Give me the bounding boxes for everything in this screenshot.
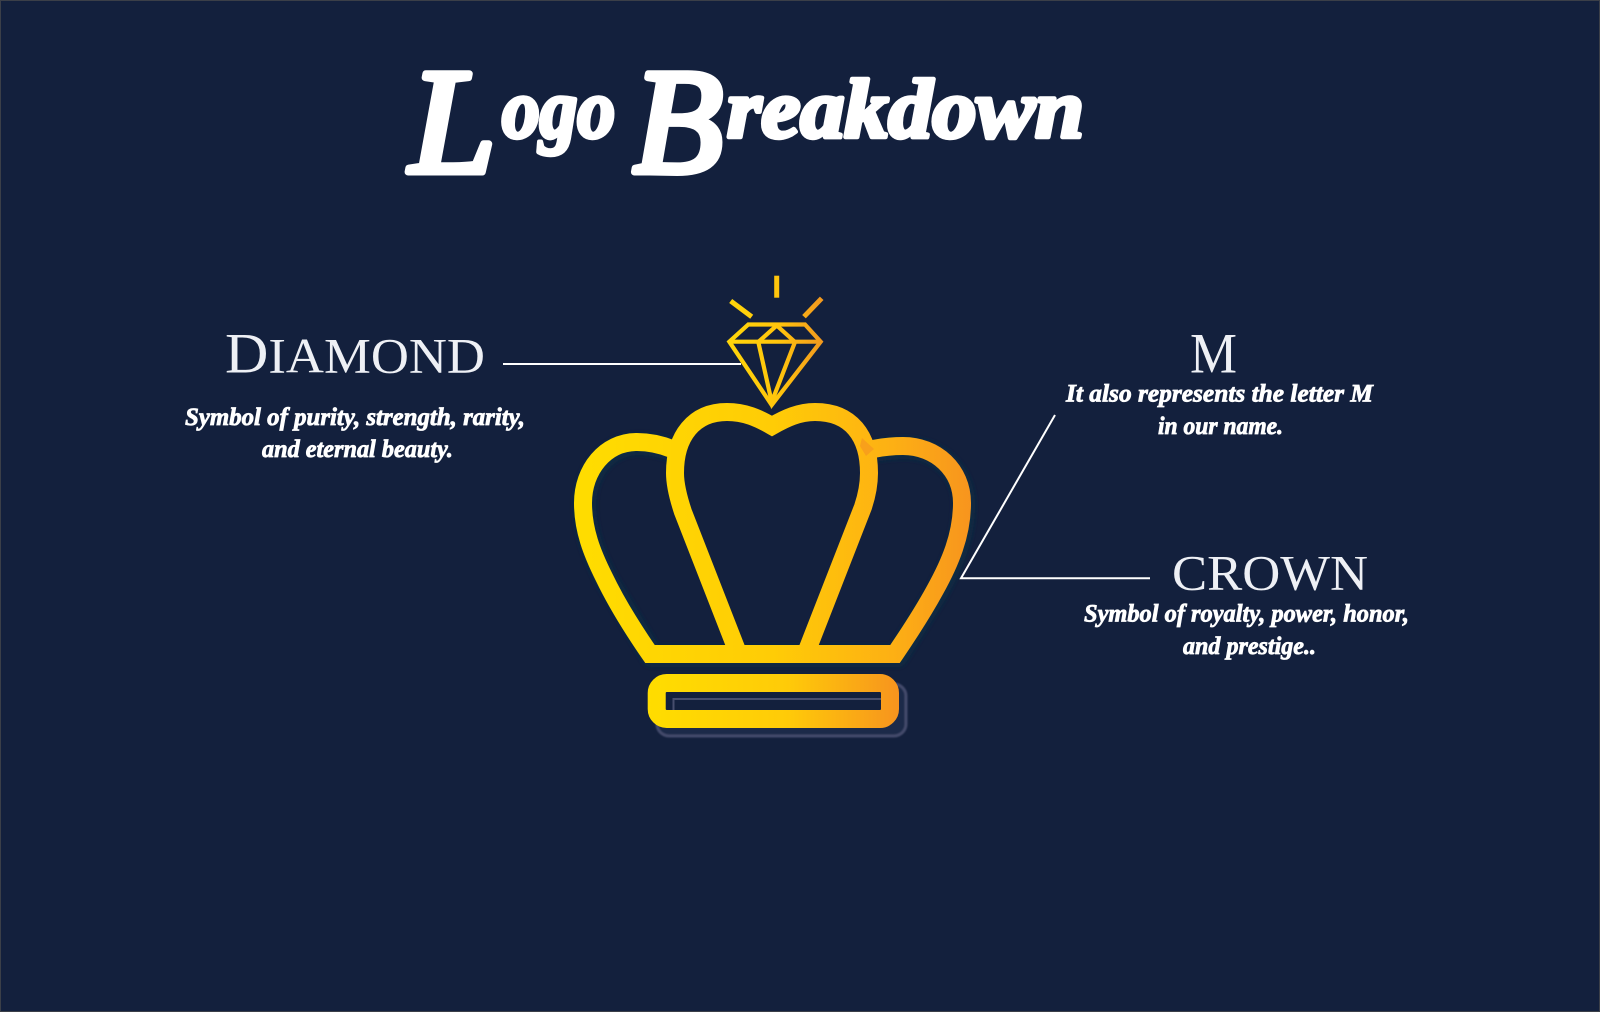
label: crown heading: CROWN — [1172, 544, 1368, 600]
text: diamond description — [185, 404, 525, 463]
title: B — [633, 39, 723, 205]
band — [657, 683, 890, 719]
crown shadow — [585, 444, 964, 656]
icon: crown — [583, 412, 964, 656]
text: M description: It also represents the letter M — [1065, 381, 1374, 408]
band shadow inner opening — [666, 692, 881, 710]
icon: diamond — [729, 276, 822, 405]
text: M description: in our name. — [1158, 413, 1283, 440]
label: M heading: M — [1190, 323, 1237, 386]
text: crown description: and prestige.. — [1183, 633, 1316, 660]
title: L — [408, 39, 496, 205]
crown lobe overlap accent — [860, 438, 874, 456]
crown outer lobes and base — [583, 442, 962, 654]
text: diamond description: Symbol of purity, strength, rarity, — [185, 404, 525, 431]
text: M description — [1065, 381, 1374, 440]
title — [408, 39, 1084, 205]
text: crown description: Symbol of royalty, power, honor, — [1084, 601, 1409, 628]
crown centre lobe — [675, 412, 869, 653]
leader line: crown and M — [961, 415, 1150, 578]
diamond sparkle rays — [731, 276, 822, 317]
label: diamond heading: DIAMOND — [225, 323, 485, 386]
title: reakdown — [727, 63, 1084, 156]
leader line: diamond — [503, 363, 741, 365]
text: diamond description: and eternal beauty. — [262, 436, 453, 463]
text: crown description — [1084, 601, 1409, 660]
band shadow — [657, 684, 906, 736]
icon: crown band — [657, 683, 906, 736]
title: ogo — [502, 63, 615, 156]
